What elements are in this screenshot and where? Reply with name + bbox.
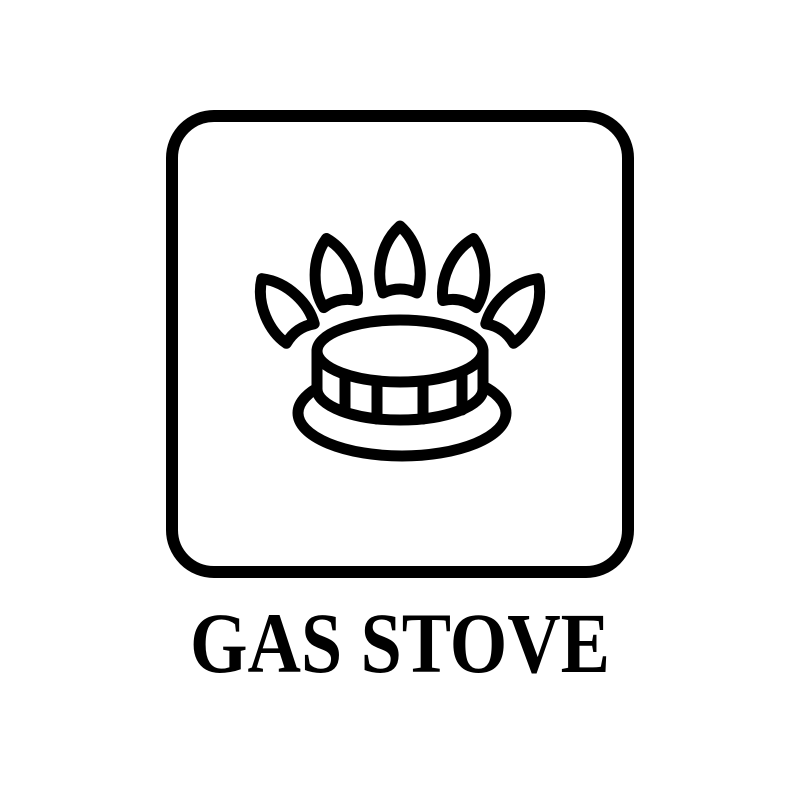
burner cap top ellipse [317, 320, 483, 382]
base plate ellipse [298, 370, 506, 456]
icon: gas burner [245, 226, 555, 456]
title: GAS STOVE: GAS STOVE [190, 595, 610, 691]
icon frame: rounded square [172, 116, 628, 572]
flames [245, 226, 555, 345]
cylinder windows [345, 372, 462, 419]
burner cylinder [317, 351, 483, 420]
